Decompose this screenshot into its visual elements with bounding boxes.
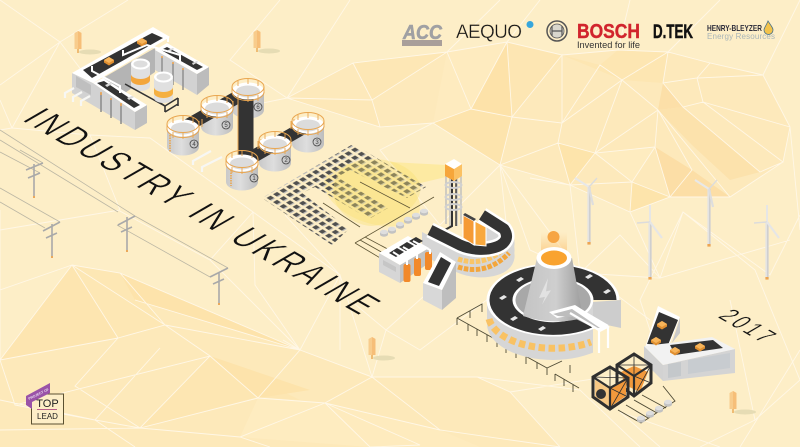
orange ball [548, 231, 560, 243]
left block walls [379, 253, 400, 283]
LEAD: LEAD [37, 412, 58, 421]
black belt [430, 215, 506, 249]
front walls [72, 73, 135, 130]
subtitle: INDUSTRY IN UKRAINE: INDUSTRY IN UKRAINE [13, 103, 389, 320]
storage tanks [125, 58, 178, 112]
tower legs [446, 175, 461, 228]
right arm roof [155, 43, 209, 74]
tank numbers: 1 [252, 176, 256, 182]
fence [457, 304, 579, 392]
G crossbar [549, 305, 610, 332]
orange cargo boxes [104, 57, 114, 66]
tank numbers: 6 [256, 105, 260, 111]
turbine 2 [637, 205, 662, 280]
tank bodies, back row [167, 91, 324, 172]
windows [458, 246, 507, 262]
letter E: industrial building [65, 27, 222, 172]
tank ladders [170, 135, 231, 186]
pole 2 [43, 222, 60, 258]
arm shadow side [672, 318, 680, 343]
inner courtyard wall [103, 48, 155, 95]
logo: DTEK: D.TEK [653, 22, 693, 43]
pipes [570, 308, 608, 353]
pole 3 [118, 216, 135, 252]
upright arm [645, 306, 680, 348]
light beam from tower [390, 162, 446, 185]
logo: AEQUO: AEQUO [456, 22, 522, 43]
logo: ACC: ACC [402, 22, 442, 44]
back crate [617, 354, 651, 396]
inner well [514, 278, 592, 322]
logo: Henry-Bleyzer: Energy Resources [707, 32, 775, 41]
background: faceted mountain bottom left [0, 265, 560, 447]
lamp 1 [74, 31, 101, 54]
round wall windows [489, 319, 591, 348]
logo: Bosch emblem [547, 21, 567, 41]
logo: Henry-Bleyzer: HENRY-BLEYZER [707, 23, 762, 33]
black conveyor belts [183, 91, 308, 163]
tower glow [541, 232, 567, 258]
purple ribbon [26, 383, 50, 409]
orange tanks [404, 252, 432, 282]
front block [423, 283, 442, 310]
power lines [0, 130, 228, 305]
lamp 2 [254, 30, 280, 54]
crates [593, 354, 675, 423]
light glow under panels [315, 152, 429, 238]
cooling tower [523, 258, 583, 322]
cargo boxes [657, 321, 667, 330]
curved wall [430, 235, 506, 269]
logo: BOSCH: Invented for life [577, 40, 640, 51]
left block roof [379, 236, 429, 265]
small lamps [74, 30, 756, 414]
lamp 3 [368, 337, 395, 360]
tower mouth [536, 247, 572, 269]
letter G: nuclear plant [457, 231, 621, 392]
logo frame [32, 394, 64, 424]
lightning bolt [539, 278, 551, 305]
letter E: solar field [264, 145, 446, 258]
tower head [445, 164, 454, 181]
pole 4 [210, 268, 228, 305]
year 2017: 2017 [712, 305, 783, 346]
solar tower [443, 159, 462, 231]
black ring [501, 271, 605, 329]
body left face [644, 346, 663, 381]
logo: Henry-Bleyzer [707, 21, 775, 41]
TOP: TOP [36, 398, 59, 410]
logo: BOSCH: BOSCH [577, 21, 640, 43]
letter N: oil tanks [167, 78, 324, 190]
small disks [380, 230, 388, 237]
crate lines [618, 386, 675, 423]
glow over panels [333, 159, 420, 226]
turbine 4 [754, 205, 779, 280]
logo: BOSCH [577, 21, 640, 51]
front arm roof [93, 78, 147, 112]
tower platforms [446, 182, 462, 188]
logo: TOP LEAD [26, 383, 64, 424]
wind turbines [575, 178, 779, 280]
disks [637, 416, 645, 423]
sponsor logos [402, 21, 775, 51]
background: faceted mountain top right [287, 42, 790, 212]
right arm walls [155, 50, 197, 95]
lamp 4 [730, 391, 756, 414]
body front face [663, 349, 735, 381]
turbine 3 [695, 180, 717, 247]
ribbon text: PROJECT OF [28, 387, 50, 401]
white pipes [92, 29, 180, 93]
ring cargo boxes [499, 274, 611, 331]
white roof rim [430, 215, 506, 249]
belt railings [199, 101, 294, 149]
body roof [644, 337, 735, 365]
pole 1 [26, 163, 43, 198]
solar panels [264, 145, 426, 245]
tank numbers [190, 103, 321, 182]
tank numbers: 2 [284, 158, 288, 164]
tank numbers: 3 [315, 140, 319, 146]
right wall piece [593, 300, 621, 328]
tank numbers: 5 [224, 123, 228, 129]
tank numbers: 4 [192, 142, 196, 148]
wires [0, 130, 228, 277]
furnace panels [463, 215, 474, 245]
tank tops, back row [167, 78, 324, 155]
letter R: power station [379, 213, 509, 310]
turbine 1 [575, 178, 597, 245]
letter Y: warehouse [644, 306, 735, 381]
roof spine [72, 27, 170, 83]
tank 1 [226, 150, 258, 190]
front crate [593, 367, 628, 409]
thin cables [323, 182, 434, 262]
round wall [487, 303, 593, 360]
